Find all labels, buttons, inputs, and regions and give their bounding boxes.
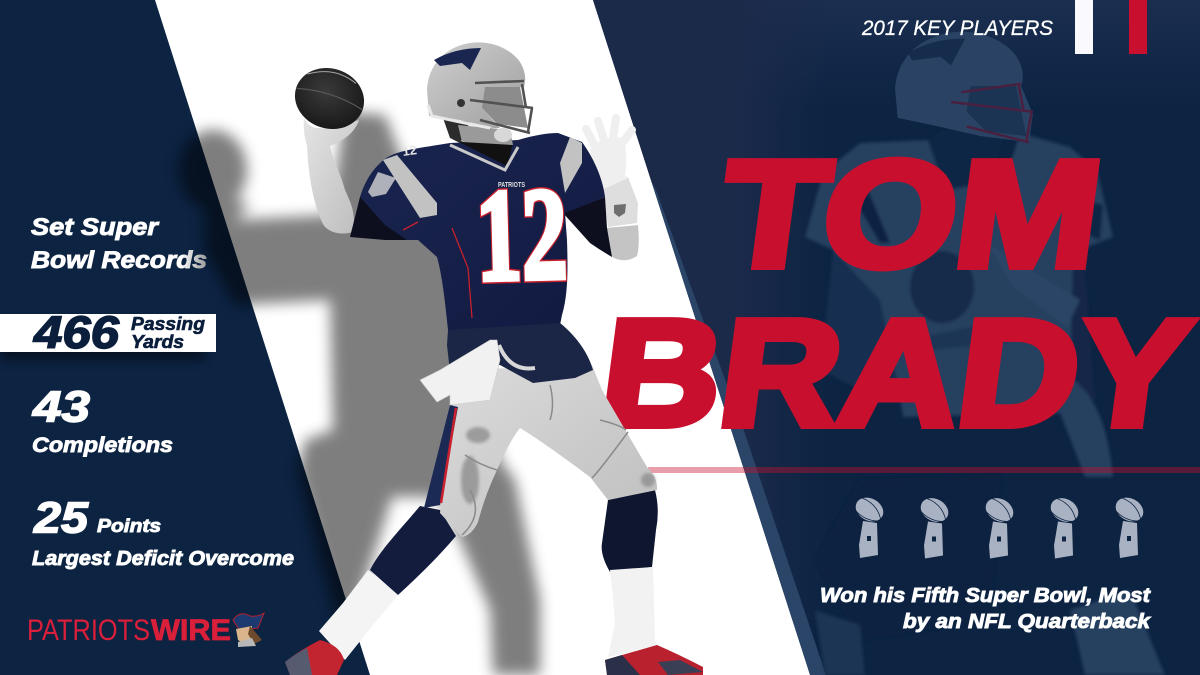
caption: fifth Super Bowl: Won his Fifth Super Bowl, Most	[820, 585, 1151, 607]
icon: trophy 2	[917, 493, 952, 558]
stat: 25 points largest deficit overcome: Largest Deficit Overcome	[32, 548, 294, 570]
icon: patriot mascot	[233, 613, 264, 647]
light edge band	[651, 180, 826, 675]
pants wear marks	[461, 427, 655, 504]
heading: Set Super Bowl Records: Bowl Records	[31, 247, 207, 274]
towel	[420, 340, 500, 405]
right shoe	[605, 645, 703, 675]
football	[287, 59, 372, 138]
divider line in red	[648, 467, 1200, 473]
icon: trophy 1	[852, 493, 887, 558]
tape mark	[614, 204, 626, 217]
collar	[450, 141, 518, 170]
helmet	[427, 42, 533, 142]
throwing arm	[304, 118, 359, 234]
heading: Set Super Bowl Records: Set Super	[31, 214, 160, 241]
jersey	[360, 133, 605, 331]
belt loop towel strap	[499, 345, 535, 369]
right shin	[602, 490, 658, 572]
shoulder number: 12	[401, 142, 418, 159]
left shoe	[285, 640, 344, 675]
glove fingers	[586, 118, 632, 148]
chest wordmark: PATRIOTS	[498, 182, 525, 189]
ghost helmet	[895, 32, 1033, 142]
stat: 466 passing yards highlight: 466	[33, 307, 120, 358]
icon: trophy 3	[982, 493, 1017, 558]
panel: left navy panel	[0, 0, 370, 675]
ghost player body	[805, 120, 1165, 675]
icon: trophy 5	[1112, 493, 1147, 558]
label: 2017 key players: 2017 KEY PLAYERS	[861, 17, 1053, 40]
logo: Patriots Wire: WIRE	[151, 614, 231, 647]
left sock	[319, 570, 398, 660]
jersey number 12: 12	[474, 160, 569, 309]
accent bars	[1075, 0, 1147, 54]
stat: 25 points largest deficit overcome: Points	[97, 516, 161, 536]
hips navy	[447, 323, 593, 383]
pants	[440, 365, 657, 537]
left leg navy shin	[370, 506, 456, 595]
chart element: player cast shadow	[179, 112, 540, 675]
caption: fifth Super Bowl: by an NFL Quarterback	[903, 611, 1151, 633]
stat: 43 completions: 43	[32, 382, 90, 432]
background tone: top	[593, 0, 1200, 85]
pants side stripe	[424, 405, 458, 508]
stat: 466 passing yards highlight: Passing	[131, 314, 205, 334]
icon row: five Lombardi trophies	[852, 493, 1147, 558]
stat: 25 points largest deficit overcome	[32, 494, 294, 570]
stat: 25 points largest deficit overcome: 25	[33, 494, 89, 542]
panel: right navy panel with ghost player	[590, 0, 1200, 675]
title: TOM BRADY: BRADY	[592, 290, 1200, 458]
neck and chin	[443, 118, 513, 145]
sleeve logo	[368, 172, 396, 197]
title: TOM BRADY: TOM	[712, 131, 1111, 299]
black undersleeves	[350, 197, 612, 257]
stat: 466 passing yards highlight	[0, 307, 216, 360]
title: TOM BRADY	[592, 131, 1200, 458]
left arm and wrist	[586, 118, 639, 260]
logo: Patriots Wire	[27, 613, 264, 647]
jersey shoulder stripes	[383, 137, 582, 218]
background tone: left	[593, 0, 792, 620]
heading: Set Super Bowl Records	[31, 214, 207, 274]
logo: Patriots Wire: PATRIOTS	[27, 614, 150, 647]
right sock	[608, 567, 658, 657]
glove palm	[590, 138, 628, 190]
stat: 43 completions	[32, 382, 173, 457]
jersey number 12	[474, 160, 569, 309]
pants creases	[462, 385, 628, 535]
stat: 466 passing yards highlight: Yards	[131, 332, 184, 352]
icon: trophy 4	[1047, 493, 1082, 558]
jersey red piping	[403, 222, 472, 318]
caption: fifth Super Bowl	[820, 585, 1151, 633]
player: Tom Brady throwing	[285, 42, 703, 675]
jersey number 12: 12	[474, 160, 569, 309]
stat: 43 completions: Completions	[32, 434, 173, 457]
